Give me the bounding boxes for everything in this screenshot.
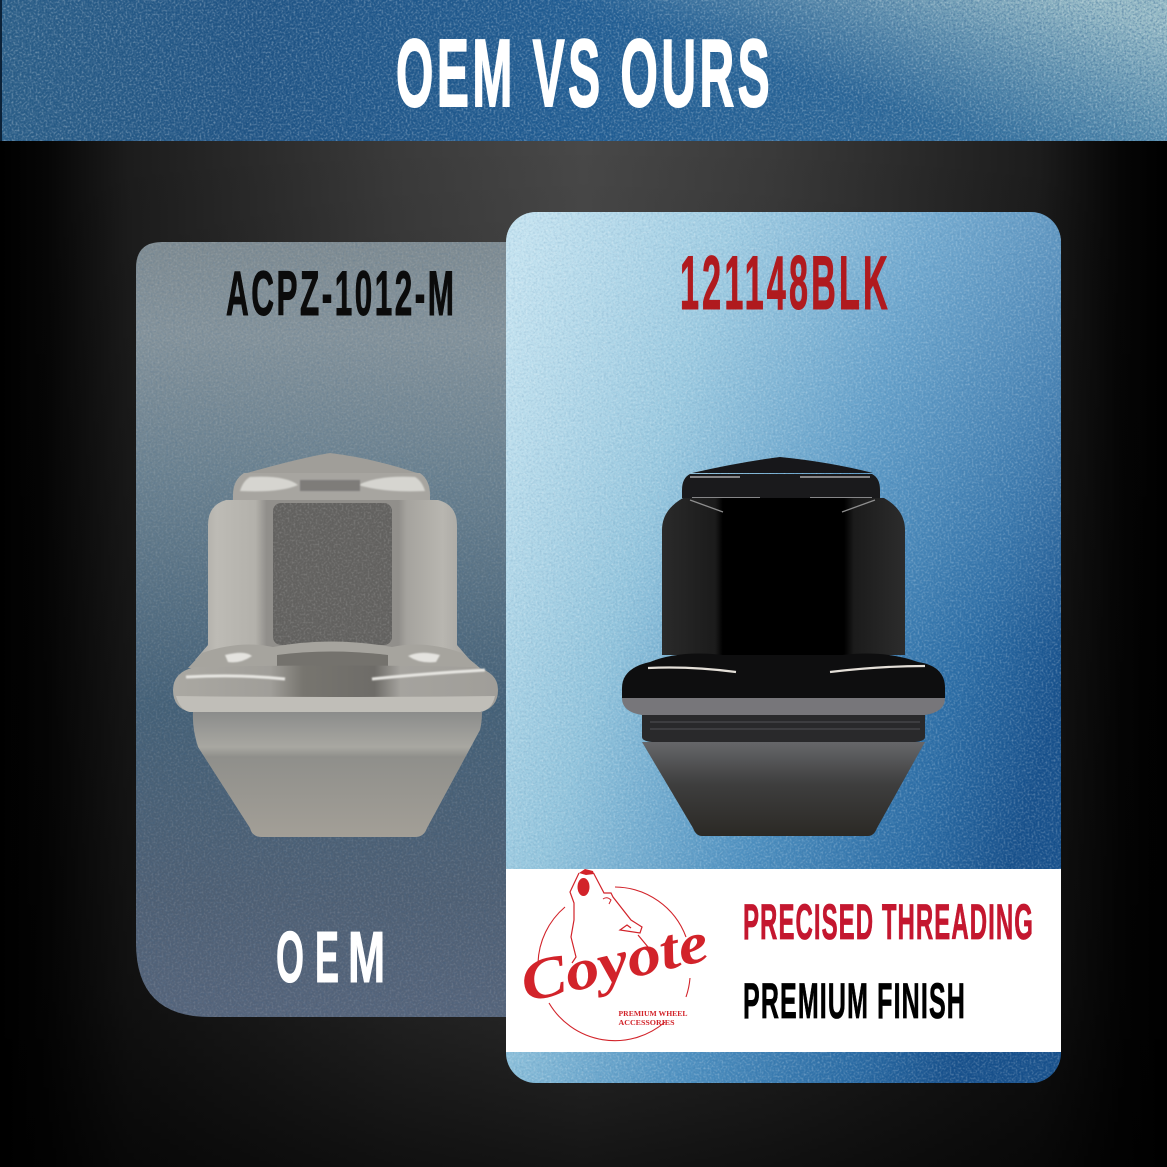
panel: ours <box>506 212 1061 1083</box>
OEM label: M <box>348 917 385 998</box>
logo: Coyote: Coyote <box>514 909 714 1015</box>
OEM part number: ACPZ-1012-M <box>226 258 457 329</box>
black lug nut <box>622 457 945 836</box>
feature: premium finish: PREMIUM FINISH <box>743 974 966 1029</box>
ours part number: 121148BLK <box>680 242 891 326</box>
logo: Coyote: PREMIUM WHEEL <box>618 1009 688 1018</box>
OEM lug nut <box>173 453 498 837</box>
OEM label <box>276 917 385 998</box>
feature: precised threading: PRECISED THREADING <box>743 896 1034 950</box>
OEM label: O <box>276 917 304 998</box>
features band <box>506 869 1061 1052</box>
header banner <box>0 0 1167 141</box>
logo: Coyote <box>514 869 714 1041</box>
title: OEM VS OURS <box>396 20 773 128</box>
panel: OEM <box>136 242 520 1017</box>
OEM label: E <box>315 917 339 998</box>
logo: Coyote: ACCESSORIES <box>618 1018 674 1027</box>
